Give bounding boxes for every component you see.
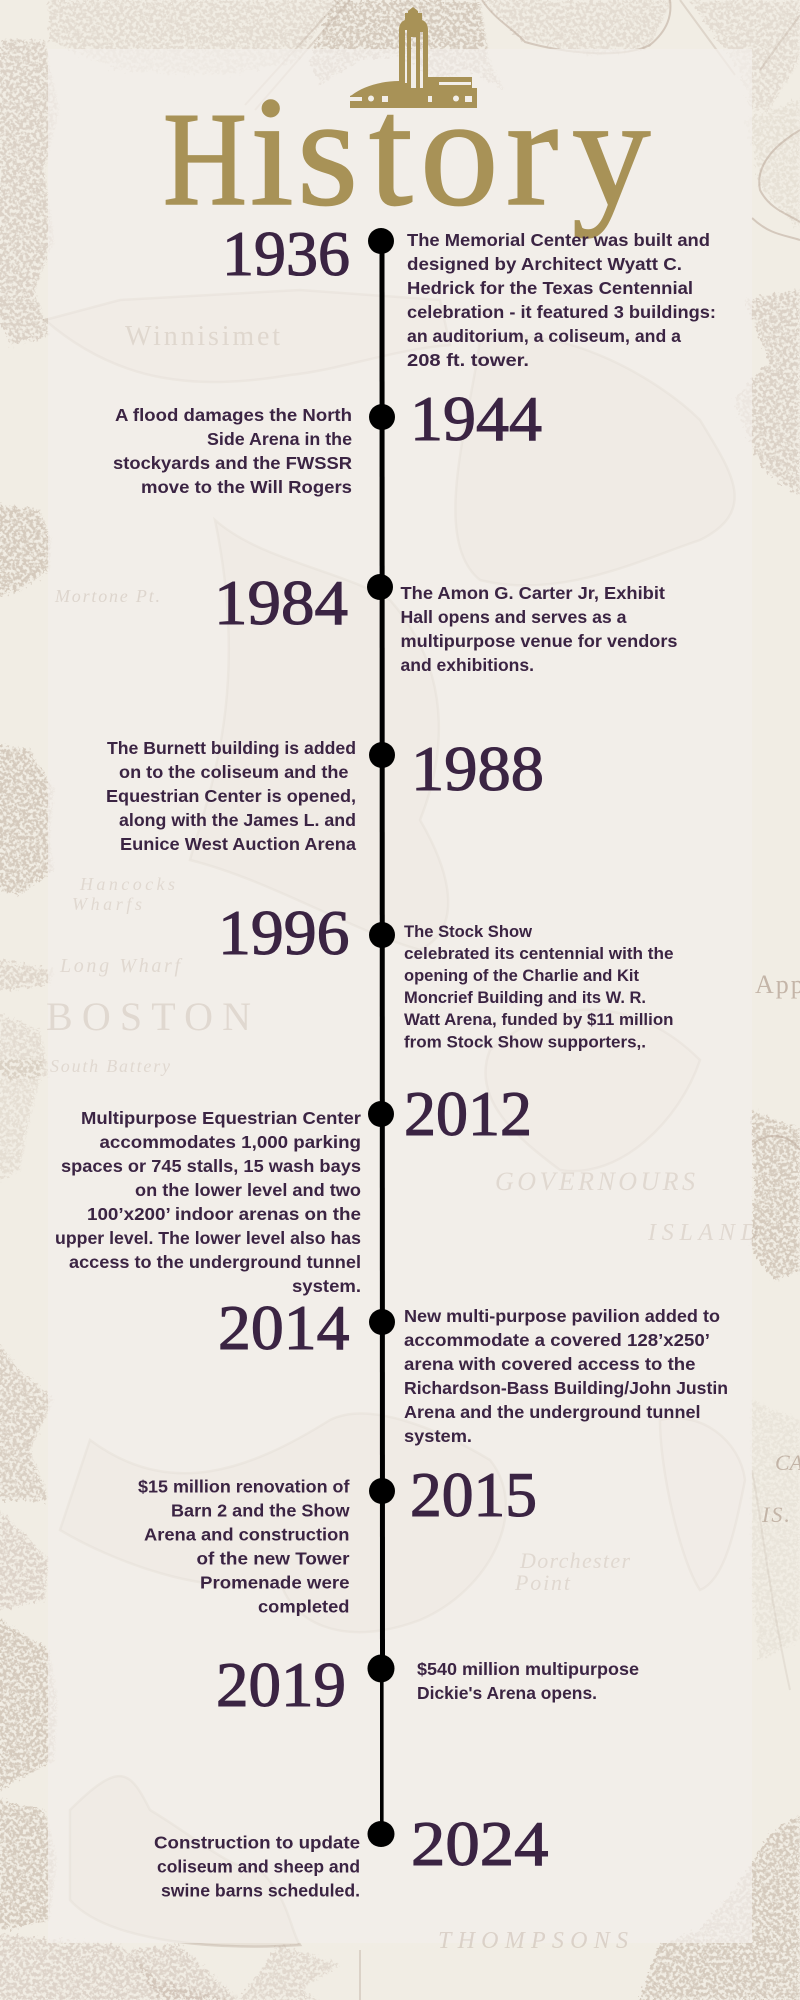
text 1988: The Burnett building is added	[107, 738, 356, 758]
entry: 2012	[55, 1078, 532, 1296]
entry: 1944	[113, 383, 542, 497]
text 1996: The Stock Show	[404, 923, 532, 941]
text 1988	[106, 738, 356, 854]
entry: 1984	[214, 567, 678, 675]
text 1936: designed by Architect Wyatt C.	[407, 254, 682, 274]
marker 2015	[369, 1478, 395, 1504]
text 2024: Construction to update	[154, 1832, 360, 1852]
entry: 2015	[138, 1459, 537, 1616]
text 2012: accommodates 1,000 parking	[100, 1132, 361, 1152]
marker 2019	[368, 1654, 394, 1682]
text 2014: New multi-purpose pavilion added to	[404, 1306, 720, 1326]
text 1988: Eunice West Auction Arena	[120, 834, 356, 854]
text 2012: Multipurpose Equestrian Center	[81, 1108, 361, 1128]
text 1996: celebrated its centennial with the	[404, 945, 674, 963]
year 1936: 1936	[222, 218, 350, 289]
text 1936	[407, 230, 716, 370]
text 2015: completed	[258, 1596, 350, 1616]
marker 1984	[367, 574, 393, 600]
map lettering: Long Wharf	[59, 955, 182, 977]
text 1996: from Stock Show supporters,.	[404, 1034, 646, 1052]
entry: 1996	[218, 897, 674, 1052]
text 1944: A flood damages the North	[115, 405, 352, 425]
text 2019	[417, 1659, 639, 1703]
map lettering: Wharfs	[72, 894, 142, 914]
text 2014: Richardson-Bass Building/John Justin	[404, 1378, 728, 1398]
marker 2024	[368, 1821, 394, 1847]
text 2015: Barn 2 and the Show	[171, 1500, 350, 1520]
year 2014: 2014	[218, 1292, 350, 1363]
text 1944	[113, 405, 352, 497]
entry: 2014	[218, 1292, 728, 1446]
year 2024: 2024	[411, 1808, 548, 1879]
text 1936: celebration - it featured 3 buildings:	[407, 302, 716, 322]
text 2012: spaces or 745 stalls, 15 wash bays	[61, 1156, 361, 1176]
text 2012: on the lower level and two	[135, 1180, 361, 1200]
text 1944: move to the Will Rogers	[141, 477, 352, 497]
text 2014: system.	[404, 1426, 472, 1446]
text 1988: Equestrian Center is opened,	[106, 786, 356, 806]
year 1988: 1988	[411, 733, 544, 804]
text 1984: multipurpose venue for vendors	[400, 631, 678, 651]
text 1996: Watt Arena, funded by $11 million	[404, 1011, 674, 1029]
year 2019: 2019	[216, 1649, 346, 1720]
text 2019: $540 million multipurpose	[417, 1659, 639, 1679]
text 1936: The Memorial Center was built and	[407, 230, 710, 250]
text 2014	[404, 1306, 728, 1446]
map lettering: Hancocks	[79, 874, 175, 894]
marker 1936	[368, 228, 394, 254]
map lettering: Mortone Pt.	[54, 586, 160, 606]
text 2012: access to the underground tunnel	[69, 1252, 361, 1272]
text 1984: Hall opens and serves as a	[400, 607, 627, 627]
text 1944: stockyards and the FWSSR	[113, 453, 352, 473]
marker 2012	[368, 1101, 394, 1127]
icon: memorial tower building	[350, 7, 477, 108]
title: H	[163, 85, 247, 233]
entry: 2019	[216, 1649, 639, 1720]
text 1984: and exhibitions.	[400, 655, 534, 675]
map lettering: IS.	[761, 1502, 792, 1527]
text 2015	[138, 1476, 350, 1616]
text 2015: Promenade were	[200, 1572, 350, 1592]
map lettering: South Battery	[50, 1056, 170, 1076]
map lettering: Point	[514, 1570, 571, 1595]
text 1984: The Amon G. Carter Jr, Exhibit	[400, 583, 665, 603]
map lettering: Dorchester	[519, 1548, 630, 1573]
marker 1944	[369, 404, 395, 430]
year 1984: 1984	[214, 567, 348, 638]
year 2012: 2012	[404, 1078, 532, 1149]
map lettering: Winnisimet	[125, 321, 280, 352]
entry: 1988	[106, 733, 544, 854]
title: istory	[250, 64, 650, 238]
map lettering: ISLAND	[647, 1220, 758, 1246]
text 2012: upper level. The lower level also has	[55, 1228, 361, 1248]
year 2015: 2015	[410, 1459, 537, 1530]
map lettering: BOSTON	[46, 994, 251, 1039]
text 2024: coliseum and sheep and	[157, 1856, 360, 1876]
text 1936: 208 ft. tower.	[407, 350, 529, 370]
text 1988: along with the James L. and	[119, 810, 356, 830]
text 1996	[404, 923, 674, 1052]
text 2015: $15 million renovation of	[138, 1476, 350, 1496]
text 1996: opening of the Charlie and Kit	[404, 967, 639, 985]
year 1996: 1996	[218, 897, 350, 968]
marker 1988	[369, 742, 395, 768]
text 2015: Arena and construction	[144, 1524, 350, 1544]
text 2019: Dickie's Arena opens.	[417, 1683, 597, 1703]
marker 2014	[369, 1309, 395, 1335]
text 2014: Arena and the underground tunnel	[404, 1402, 700, 1422]
text 2012: system.	[292, 1276, 361, 1296]
entry: 1936	[222, 218, 716, 370]
text 2012	[55, 1108, 361, 1296]
text 2014: arena with covered access to the	[404, 1354, 696, 1374]
text 1984	[400, 583, 678, 675]
text 1996: Moncrief Building and its W. R.	[404, 989, 646, 1007]
entry: 2024	[154, 1808, 548, 1900]
text 2024	[154, 1832, 360, 1900]
year 1944: 1944	[410, 383, 542, 454]
marker 1996	[369, 922, 395, 948]
map lettering: GOVERNOURS	[495, 1167, 695, 1196]
text 1988: on to the coliseum and the	[119, 762, 349, 782]
text 2014: accommodate a covered 128’x250’	[404, 1330, 710, 1350]
text 1936: an auditorium, a coliseum, and a	[407, 326, 681, 346]
text 2015: of the new Tower	[196, 1548, 350, 1568]
text 2012: 100’x200’ indoor arenas on the	[87, 1204, 361, 1224]
text 2024: swine barns scheduled.	[161, 1880, 360, 1900]
map lettering	[46, 321, 800, 1954]
map lettering: THOMPSONS	[438, 1928, 628, 1954]
faint land seen through the wash	[45, 290, 745, 1947]
text 1944: Side Arena in the	[207, 429, 352, 449]
text 1936: Hedrick for the Texas Centennial	[407, 278, 693, 298]
timeline line	[380, 241, 385, 1834]
